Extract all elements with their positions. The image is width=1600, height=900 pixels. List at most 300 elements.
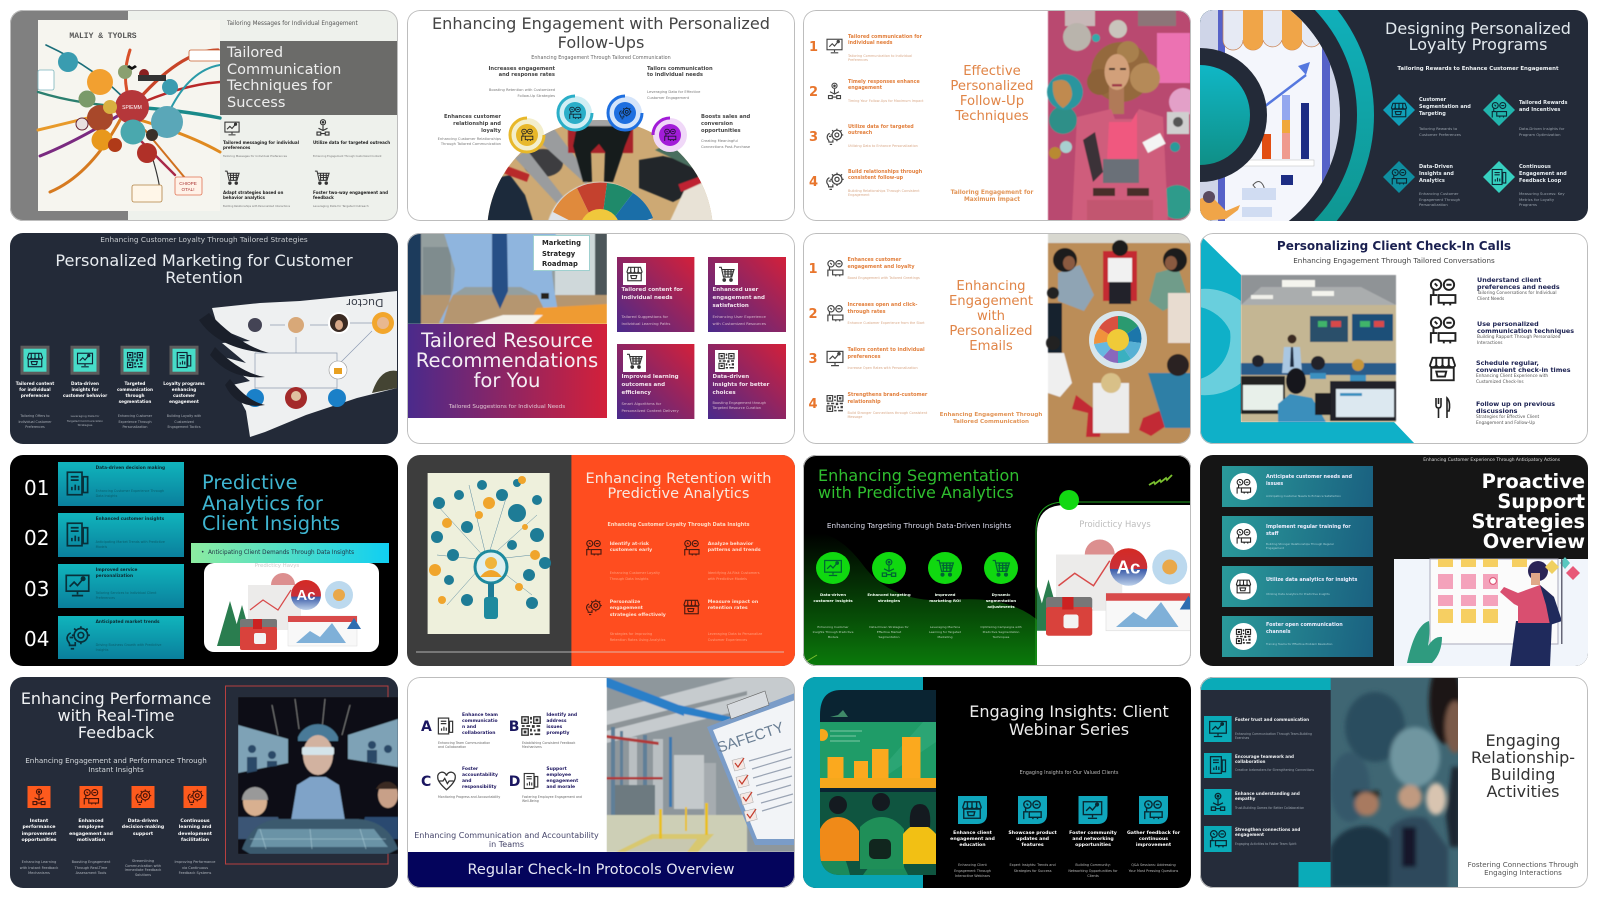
item: tailors communication bbox=[647, 66, 713, 100]
heading bbox=[1419, 164, 1454, 185]
description: Targeted Resource Curation bbox=[712, 406, 761, 410]
description bbox=[14, 860, 64, 877]
subtitle: Enhancing Engagement Through Tailored Conversations bbox=[1293, 256, 1495, 264]
description: Leveraging Machine bbox=[930, 624, 960, 628]
title: Personalizing Client Check-In Calls bbox=[1277, 239, 1511, 253]
callout band: • Anticipating Client Demands Through Data Insights bbox=[201, 550, 354, 556]
title: Enhancing Performance bbox=[21, 688, 211, 708]
letter: C bbox=[421, 774, 431, 790]
description: Building Community: bbox=[1075, 863, 1111, 867]
letter: D bbox=[509, 774, 520, 790]
heading: insights for better bbox=[712, 382, 769, 388]
heading bbox=[66, 819, 116, 845]
heading: Identify and bbox=[546, 713, 577, 718]
heading: Improved bbox=[935, 592, 955, 597]
heading: Feedback Loop bbox=[1519, 178, 1561, 184]
description: Customer Preferences bbox=[1419, 132, 1461, 137]
title bbox=[202, 473, 340, 534]
title: Relationship- bbox=[1471, 748, 1575, 766]
description: Boosting Engagement through bbox=[712, 401, 766, 405]
title bbox=[953, 702, 1185, 739]
description: Through Data Insights bbox=[610, 577, 648, 581]
description: Feedback Systems bbox=[179, 871, 211, 875]
item 1 bbox=[809, 34, 922, 62]
icon: dashboard bbox=[64, 572, 91, 599]
image: semicircle team photo with icon rings bbox=[488, 94, 712, 220]
heading: segmentation bbox=[986, 598, 1016, 603]
card 02 bbox=[58, 513, 184, 557]
description: Boost Engagement with Tailored Greetings bbox=[848, 276, 920, 280]
heading: promptly bbox=[546, 731, 569, 736]
item 3 bbox=[808, 344, 936, 376]
title: Strategies bbox=[1471, 510, 1585, 533]
panel: Enhancing Retention with Predictive Analytics bbox=[407, 455, 795, 666]
description: Expert Insights: Trends and bbox=[1010, 863, 1056, 867]
image: man at sticky-note board bbox=[1200, 455, 1588, 666]
description: Engagement and Follow-Up bbox=[1476, 421, 1535, 426]
heading: Enhances customer bbox=[444, 114, 501, 120]
description: Improving Performance bbox=[175, 860, 215, 864]
item: increases engagement bbox=[488, 66, 555, 98]
description: Through Real-Time bbox=[75, 866, 107, 870]
description: Enhancing Customer Relationships bbox=[438, 136, 501, 140]
heading: Strengthens brand-customer bbox=[848, 392, 927, 398]
title: Emails bbox=[969, 339, 1013, 354]
heading bbox=[622, 287, 683, 303]
heading bbox=[96, 568, 137, 581]
description: Engagement bbox=[1266, 546, 1284, 550]
icon: QR code bbox=[520, 715, 542, 737]
description: Utilizing Data to Enhance Personalization bbox=[848, 144, 918, 148]
heading: Increases open and click- bbox=[848, 302, 917, 308]
description: Engagement Through bbox=[1419, 197, 1460, 202]
item 3 bbox=[1204, 789, 1326, 815]
description: Boosting Engagement bbox=[72, 860, 110, 864]
icon: monitor circle bbox=[816, 552, 850, 584]
description: Training Teams for Effective Problem Resolution bbox=[1266, 642, 1332, 646]
heading: behavior analytics bbox=[223, 194, 265, 200]
subtitle: Tailoring Rewards to Enhance Customer Engagement bbox=[1397, 66, 1559, 72]
item C bbox=[419, 767, 504, 805]
heading bbox=[223, 190, 284, 200]
icon: fork and knife bbox=[1431, 393, 1455, 423]
card 2 bbox=[708, 257, 786, 332]
item 4 bbox=[682, 598, 772, 648]
heading: Customer bbox=[1419, 97, 1446, 103]
description: Targeted Communication bbox=[67, 419, 103, 423]
description bbox=[1124, 863, 1184, 874]
item 2 bbox=[808, 299, 936, 331]
icon: orange tile 4 bbox=[184, 786, 206, 808]
title: Techniques bbox=[955, 109, 1029, 124]
panel: Personalized Follow-Ups bbox=[407, 10, 795, 221]
description bbox=[647, 90, 700, 100]
description bbox=[96, 591, 156, 602]
description: Creating Meaningful bbox=[701, 138, 738, 142]
panel: Effective Personalized Follow-Up Techniques bbox=[803, 10, 1191, 221]
description bbox=[61, 414, 109, 428]
heading: conversion bbox=[701, 121, 733, 127]
heading: loyalty bbox=[481, 128, 501, 134]
icon: tile 2 bbox=[1018, 796, 1047, 824]
heading: retention rates bbox=[708, 606, 748, 611]
band title: Regular Check-In Protocols Overview bbox=[468, 862, 734, 878]
heading: adjustments bbox=[987, 604, 1015, 609]
heading: to individual needs bbox=[647, 72, 703, 78]
image: green wave and analytics card: Proidicticy Havys bbox=[1079, 519, 1151, 529]
description: Exercises bbox=[1235, 736, 1249, 740]
icon: QR code bbox=[824, 394, 844, 413]
description: Engagement Tactics bbox=[167, 425, 201, 429]
description bbox=[610, 631, 665, 643]
description: Personalization bbox=[1419, 202, 1448, 207]
heading: opportunities bbox=[701, 128, 741, 134]
heading bbox=[11, 381, 59, 399]
item 4 bbox=[170, 819, 220, 879]
description: Connections Post-Purchase bbox=[701, 145, 750, 149]
card 4 bbox=[1222, 616, 1373, 657]
item A bbox=[419, 713, 504, 751]
panel: Enhancing Segmentation with Predictive Analytics bbox=[803, 455, 1191, 666]
heading: personalization bbox=[96, 574, 133, 579]
description: Building Loyalty with bbox=[167, 414, 201, 418]
heading: opportunities bbox=[1075, 843, 1111, 848]
description: Clients bbox=[1087, 874, 1099, 878]
heading bbox=[712, 287, 765, 311]
description: and Collaboration bbox=[438, 745, 466, 749]
description: Tailored Suggestions for bbox=[622, 314, 668, 319]
description bbox=[96, 643, 161, 654]
letter: B bbox=[509, 719, 519, 735]
heading: Enhance understanding and bbox=[1235, 791, 1300, 796]
heading: communicatio bbox=[462, 719, 498, 724]
description: Q&A Sessions: Addressing bbox=[1131, 863, 1176, 867]
description bbox=[160, 414, 208, 431]
item: adapt strategies bbox=[223, 170, 290, 208]
title: Communication bbox=[227, 62, 341, 78]
description: Engaging Activities to Foster Team Spirit bbox=[1235, 842, 1297, 846]
heading bbox=[223, 140, 299, 150]
icon: blue ring bbox=[608, 96, 642, 130]
description: Building Relationships with Personalized Interactions bbox=[223, 204, 290, 208]
heading bbox=[610, 600, 666, 619]
title bbox=[10, 252, 398, 286]
description: Personalization bbox=[122, 425, 148, 429]
description: Preferences bbox=[848, 58, 868, 62]
card 01 bbox=[58, 462, 184, 506]
heading: Implement regular training for bbox=[1266, 524, 1351, 530]
heading: engagement and bbox=[69, 832, 113, 837]
subtitle: Engaging Insights for Our Valued Clients bbox=[1020, 770, 1118, 776]
icon: monitor box bbox=[70, 346, 100, 375]
description: Customer Experiences bbox=[708, 638, 747, 642]
number: 4 bbox=[809, 174, 818, 190]
description: Insights bbox=[96, 648, 108, 652]
heading: Personalize bbox=[610, 600, 640, 605]
heading: channels bbox=[1266, 629, 1291, 635]
description: Message bbox=[848, 415, 862, 419]
heading bbox=[1476, 360, 1571, 375]
heading: customer insights bbox=[813, 598, 853, 603]
description: Solutions bbox=[135, 873, 151, 877]
icon: diamond 1 bbox=[1383, 94, 1415, 126]
number column: 02 bbox=[24, 526, 49, 550]
heading bbox=[170, 819, 220, 845]
item 4 bbox=[974, 552, 1028, 644]
panel: Proactive Support Strategies Overview bbox=[1200, 455, 1588, 666]
title: Success bbox=[227, 95, 285, 111]
heading bbox=[848, 79, 920, 91]
panel: Personalized Marketing for Customer Retention bbox=[10, 233, 398, 444]
title: Enhancing Retention with bbox=[586, 470, 771, 486]
heading bbox=[1003, 831, 1063, 850]
heading: education bbox=[959, 843, 986, 848]
heading: motivation bbox=[77, 838, 105, 843]
heading: employee bbox=[78, 825, 104, 830]
title: Webinar Series bbox=[1009, 720, 1129, 739]
label: marketing roadmap bbox=[533, 235, 590, 271]
tagline bbox=[950, 190, 1034, 203]
heading: Timely responses enhance bbox=[848, 80, 920, 85]
icon: monitor bbox=[824, 349, 844, 368]
description: Building Stronger Relationships Through Regular bbox=[1266, 542, 1334, 546]
icon tile 4 bbox=[1204, 826, 1232, 852]
description bbox=[1266, 542, 1334, 550]
icon: document gear bbox=[436, 715, 455, 737]
icon: people bbox=[824, 304, 844, 323]
heading: Tailored content for bbox=[622, 287, 683, 293]
item 3 bbox=[111, 381, 159, 436]
description: Data-Driven Strategies for bbox=[869, 624, 909, 628]
title: Engaging Insights: Client bbox=[969, 702, 1169, 720]
icon: orange tile 3 bbox=[132, 786, 154, 808]
subtitle bbox=[1458, 860, 1588, 878]
heading: Utilize data for targeted bbox=[848, 125, 914, 130]
item 1 bbox=[808, 254, 936, 286]
description: Assessment Tools bbox=[76, 871, 106, 875]
description: Segmentation bbox=[878, 634, 900, 638]
description bbox=[1419, 126, 1461, 137]
description bbox=[96, 540, 165, 551]
item: enhances relationship bbox=[438, 114, 501, 146]
title: Support bbox=[1497, 490, 1585, 513]
icon: monitor bbox=[224, 122, 240, 136]
heading: insights for bbox=[71, 387, 99, 392]
item 1 bbox=[1443, 277, 1583, 309]
description: Communication with bbox=[125, 864, 161, 868]
title: Loyalty Programs bbox=[1409, 35, 1547, 54]
description bbox=[708, 631, 762, 643]
icon: calculator document bbox=[64, 470, 91, 497]
card 1 bbox=[1222, 466, 1373, 507]
heading: accountability bbox=[462, 773, 498, 778]
image: colourful mind map: SPIEMM bbox=[122, 105, 142, 111]
title bbox=[1458, 732, 1588, 800]
heading: preferences bbox=[848, 354, 881, 360]
item 1 bbox=[584, 539, 674, 585]
icon: cart bbox=[715, 263, 738, 285]
title: Enhancing bbox=[956, 278, 1026, 294]
description: Techniques bbox=[993, 634, 1009, 638]
item 3 bbox=[1063, 831, 1123, 883]
heading: facilitation bbox=[181, 838, 209, 843]
image: colourful mind map bbox=[10, 10, 397, 221]
number: 3 bbox=[808, 352, 818, 366]
item 1 bbox=[14, 819, 64, 879]
description: Interactive Webinars bbox=[955, 874, 990, 878]
description bbox=[489, 88, 555, 98]
icon: network circle bbox=[872, 552, 906, 584]
title: Follow-Up bbox=[960, 94, 1024, 109]
image: storefront growth chart in circle bbox=[1200, 10, 1515, 221]
item 4 bbox=[1443, 401, 1583, 433]
description: Individual Learning Paths bbox=[622, 320, 670, 326]
description bbox=[438, 741, 490, 749]
description: Preferences bbox=[96, 596, 115, 600]
heading: efficiency bbox=[622, 390, 651, 396]
item 3 bbox=[809, 124, 918, 148]
heading bbox=[848, 124, 914, 136]
icon: diamond 2 bbox=[1483, 94, 1515, 126]
heading: consistent follow-up bbox=[848, 176, 903, 181]
number column: 04 bbox=[24, 627, 49, 651]
description bbox=[111, 414, 159, 431]
title bbox=[432, 14, 770, 52]
icon: yellow ring bbox=[510, 118, 544, 152]
icon: tile 1 bbox=[958, 796, 987, 824]
item 2 bbox=[862, 552, 916, 644]
heading bbox=[1519, 100, 1567, 114]
card 3 bbox=[1222, 566, 1373, 607]
callout band bbox=[191, 543, 389, 563]
heading bbox=[701, 114, 750, 134]
description: Personalized Content Delivery bbox=[622, 408, 679, 412]
heading: improvement bbox=[22, 832, 56, 837]
icon circle bbox=[1230, 623, 1257, 650]
description: Strategies for Improving bbox=[610, 632, 652, 636]
title: Activities bbox=[1486, 782, 1560, 800]
card 04 bbox=[58, 616, 184, 659]
heading: opportunities bbox=[21, 838, 57, 843]
heading: engagement and loyalty bbox=[848, 264, 915, 270]
icon: gear bulb bbox=[824, 171, 845, 191]
heading: engagement and bbox=[950, 837, 995, 842]
description bbox=[848, 410, 927, 419]
icon: cart bbox=[623, 350, 646, 372]
heading: Follow up on previous bbox=[1476, 400, 1555, 408]
description: Enhancing Client bbox=[958, 863, 987, 867]
heading bbox=[313, 190, 388, 200]
description: Enhancing Customer bbox=[118, 414, 152, 418]
item 4 bbox=[809, 169, 922, 197]
subtitle: Enhancing Targeting Through Data-Driven Insights bbox=[827, 521, 1011, 530]
icon: storefront bbox=[682, 598, 701, 616]
heading: updates and bbox=[1016, 837, 1049, 842]
description: Trust-Building Games for Better Collaboration bbox=[1235, 806, 1304, 810]
heading bbox=[708, 542, 761, 555]
description: Predictive Segmentation bbox=[983, 630, 1019, 634]
icon circle bbox=[1230, 523, 1257, 550]
title bbox=[1471, 472, 1585, 552]
heading bbox=[462, 713, 498, 737]
heading bbox=[848, 302, 917, 315]
description bbox=[712, 314, 766, 327]
subtitle: Enhancing Customer Loyalty Through Data Insights bbox=[607, 522, 750, 528]
heading: Analytics bbox=[1419, 178, 1445, 184]
heading bbox=[1477, 277, 1560, 292]
item B bbox=[507, 713, 592, 751]
heading bbox=[1235, 791, 1300, 802]
panel: Regular Check-In Protocols Overview bbox=[407, 677, 795, 888]
description bbox=[806, 624, 860, 640]
description: Increase Open Rates with Personalization bbox=[848, 366, 918, 370]
icon: network bbox=[828, 82, 842, 100]
icon: people with laptop bbox=[1426, 277, 1459, 308]
item 1 bbox=[11, 381, 59, 436]
heading bbox=[942, 831, 1002, 850]
description: Retention Rates Using Analytics bbox=[610, 638, 665, 642]
description bbox=[942, 863, 1002, 880]
description: Anticipating Customer Needs to Enhance Satisfaction bbox=[1266, 494, 1341, 498]
heading: Data-driven bbox=[71, 381, 99, 386]
heading: enhancing bbox=[172, 387, 196, 392]
heading: choices bbox=[712, 390, 736, 396]
icon: diamond 4 bbox=[1483, 161, 1515, 193]
card 3 bbox=[617, 344, 694, 419]
item 1 bbox=[942, 831, 1002, 883]
heading: engagement bbox=[848, 86, 882, 91]
title bbox=[1378, 20, 1578, 54]
heading: Boosts sales and bbox=[701, 114, 750, 120]
panel: Personalized Emails bbox=[803, 233, 1191, 444]
title: Techniques for bbox=[227, 78, 332, 94]
image: call centre photo on teal shape bbox=[1200, 233, 1588, 444]
heading: Schedule regular, bbox=[1476, 359, 1539, 367]
description: Strategies bbox=[78, 423, 92, 427]
icon: gear person bbox=[826, 128, 844, 145]
item 3 bbox=[1443, 360, 1583, 392]
card 1 bbox=[617, 257, 694, 332]
tagline: Tailored Communication bbox=[953, 418, 1029, 424]
title: Designing Personalized bbox=[1385, 18, 1571, 38]
heading: customer behavior bbox=[63, 393, 107, 398]
heading: Foster community bbox=[1069, 831, 1117, 836]
description: Enhancing Customer bbox=[1419, 191, 1459, 196]
heading bbox=[848, 170, 922, 183]
description bbox=[522, 741, 575, 749]
description: Mechanisms bbox=[28, 871, 50, 875]
heading: outreach bbox=[848, 131, 872, 136]
description: Optimizing Campaigns with bbox=[980, 624, 1022, 628]
icon: document box bbox=[170, 346, 198, 375]
description bbox=[66, 860, 116, 877]
heading: Continuous bbox=[180, 819, 210, 824]
heading: Improved learning bbox=[622, 374, 679, 380]
heading: Analyze behavior bbox=[708, 542, 753, 547]
description: with Customized Resources bbox=[712, 320, 766, 326]
description: Leveraging Data for Effective bbox=[647, 90, 700, 94]
image: analytics illustration card: Predicticy Havys bbox=[255, 563, 299, 569]
heading: address bbox=[546, 719, 566, 724]
icon tile 3 bbox=[1204, 789, 1232, 815]
heading: development bbox=[178, 832, 212, 837]
title: Retention bbox=[165, 268, 243, 286]
description: Tailoring Rewards to bbox=[1419, 126, 1457, 131]
description: Preferences bbox=[25, 425, 45, 429]
card 03 bbox=[58, 564, 184, 608]
heading: Measure impact on bbox=[708, 600, 758, 605]
icon: orange tile 1 bbox=[28, 786, 50, 808]
